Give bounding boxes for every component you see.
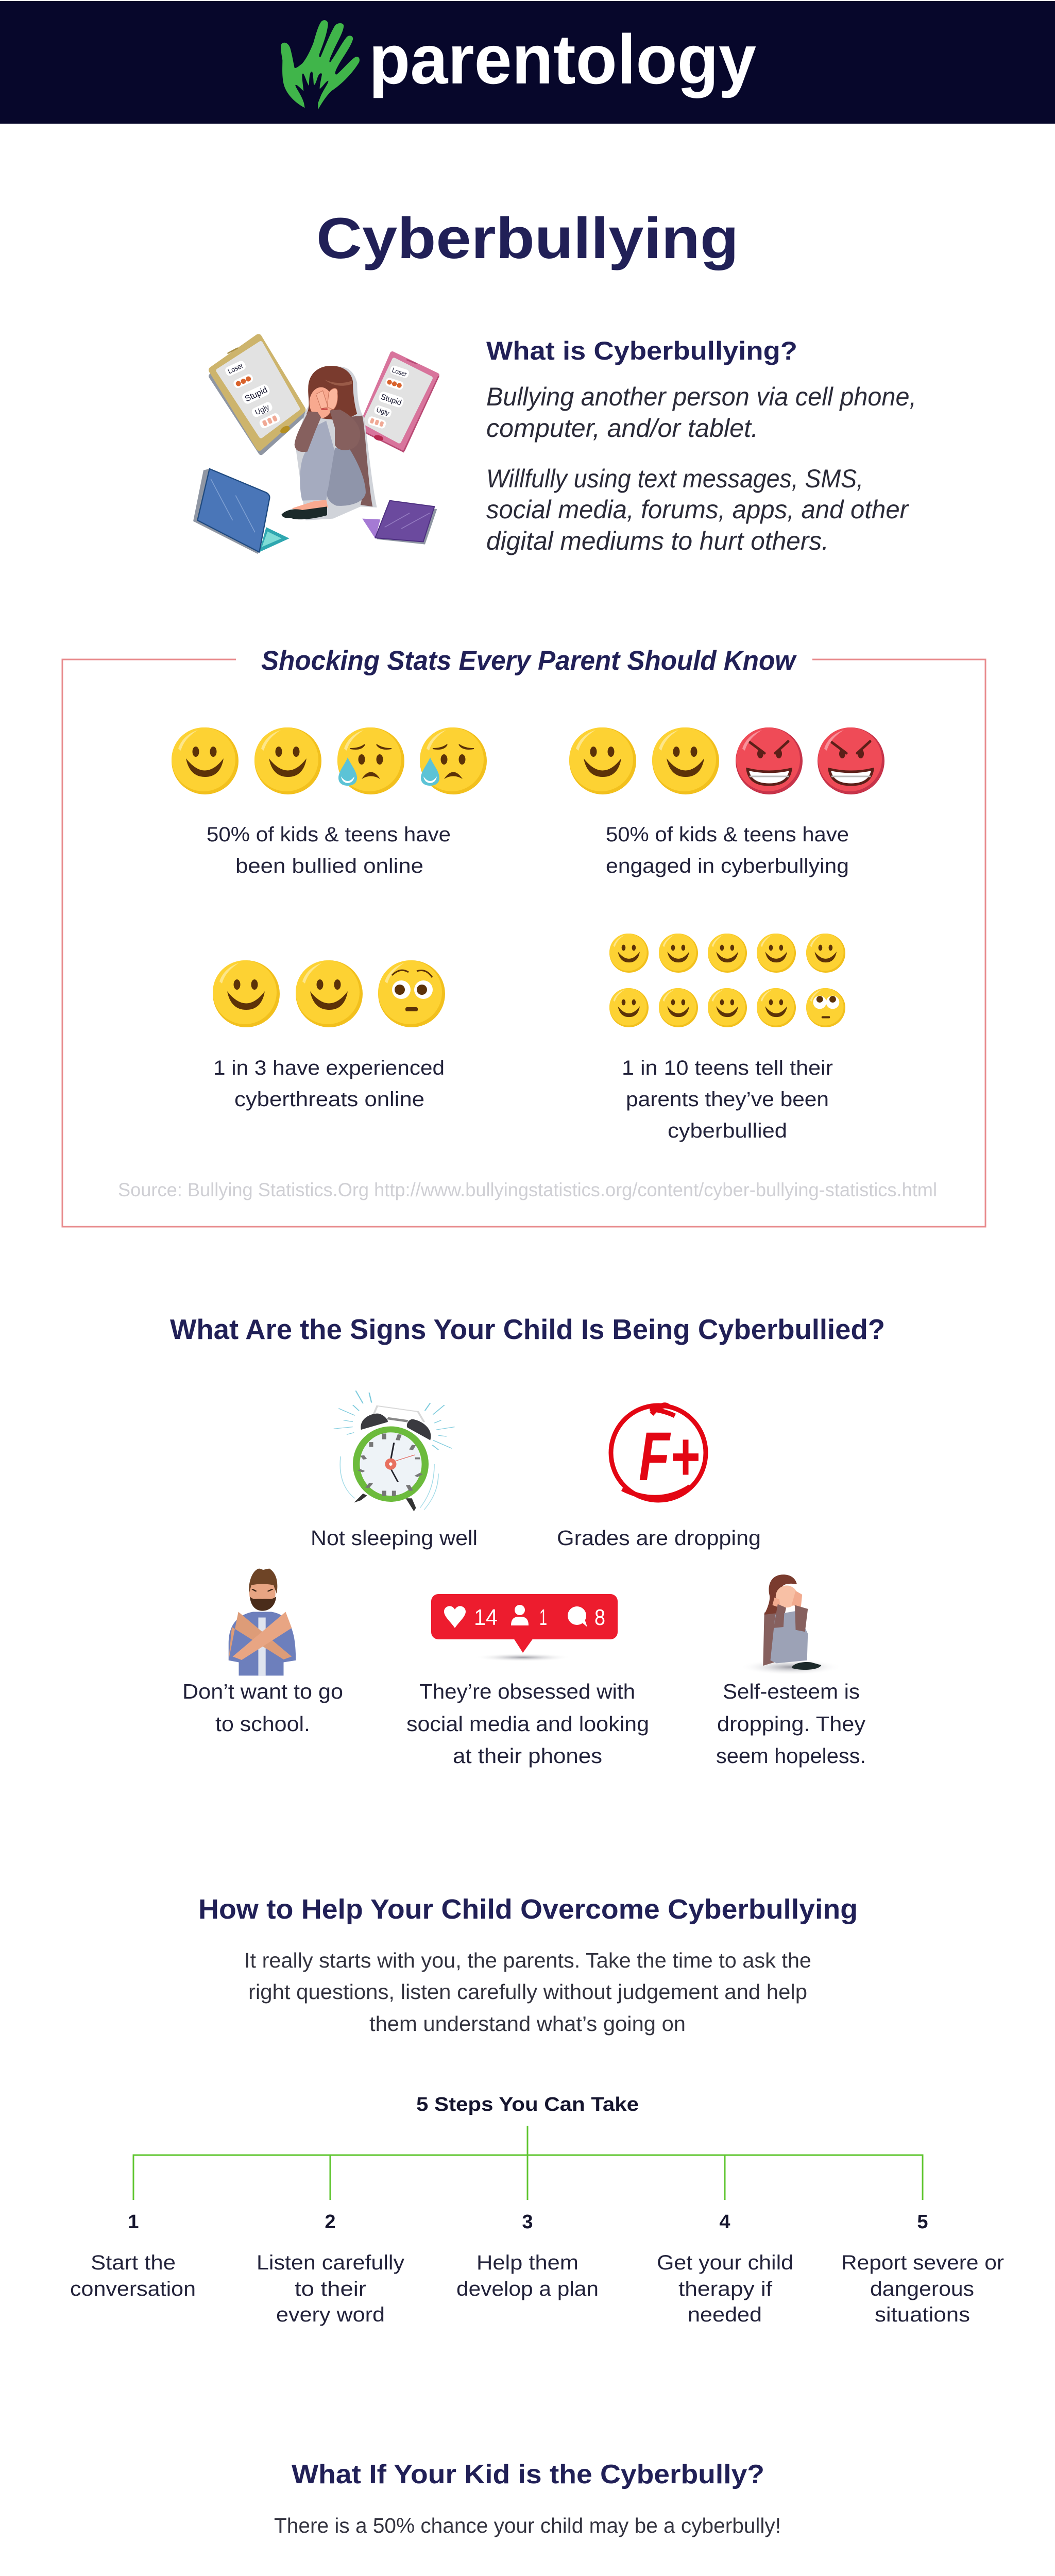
subheading: What is Cyberbullying? xyxy=(486,336,797,365)
comment count xyxy=(568,1605,605,1630)
follower count xyxy=(511,1605,547,1630)
stat: tell parents: cyberbullied xyxy=(668,1120,787,1142)
step 4: therapy if xyxy=(678,2278,773,2300)
step 5: dangerous xyxy=(870,2278,974,2300)
connector tree xyxy=(133,2126,923,2200)
stat: been bullied: 50% of kids & teens have xyxy=(207,823,451,846)
heart count: 14 xyxy=(474,1605,498,1630)
definition two: social media, forums, apps, and other xyxy=(486,495,909,524)
heading: how to help: How to Help Your Child Overcome Cyberbullying xyxy=(198,1894,858,1925)
label: obsessed: at their phones xyxy=(453,1744,602,1768)
heart count xyxy=(444,1605,498,1630)
label: school: to school. xyxy=(215,1712,310,1736)
heading: signs: What Are the Signs Your Child Is Being Cyberbullied? xyxy=(170,1313,885,1345)
icon: pink phone xyxy=(359,354,439,452)
step 1: 1 xyxy=(128,2211,139,2233)
label: not sleeping: Not sleeping well xyxy=(311,1526,478,1550)
icon: gold phone: Ugly xyxy=(254,403,271,417)
definition two xyxy=(486,464,909,555)
follower count: 1 xyxy=(539,1605,547,1630)
definition one: computer, and/or tablet. xyxy=(486,414,758,443)
label: self-esteem: seem hopeless. xyxy=(716,1744,866,1768)
step 1: Start the xyxy=(91,2251,176,2274)
step 3 xyxy=(456,2211,599,2300)
icon: gold phone xyxy=(211,337,304,452)
label: obsessed: social media and looking xyxy=(406,1712,649,1736)
label: obsessed: They’re obsessed with xyxy=(419,1680,635,1703)
label: self-esteem xyxy=(716,1680,866,1768)
stat: cyberthreats: cyberthreats online xyxy=(234,1088,424,1111)
header banner xyxy=(0,1,1055,124)
definition one: Bullying another person via cell phone, xyxy=(486,382,916,411)
step 2: 2 xyxy=(325,2211,336,2233)
intro paragraph: them understand what’s going on xyxy=(369,2012,686,2036)
label: obsessed xyxy=(406,1680,649,1768)
stat: engaged in cyberbullying: 50% of kids & teens have xyxy=(606,823,849,846)
icon: purple laptop xyxy=(362,501,437,545)
icon: pink phone: Ugly xyxy=(376,405,390,417)
stat: engaged in cyberbullying xyxy=(569,727,884,877)
step 4 xyxy=(657,2211,793,2326)
icon: gold phone: Loser xyxy=(227,361,245,376)
source note: Source: Bullying Statistics.Org http://www.bullyingstatistics.org/content/cyber-bullying-statistics.html xyxy=(118,1179,937,1200)
icon: man crossing arms xyxy=(229,1568,296,1675)
definition two: digital mediums to hurt others. xyxy=(486,527,829,555)
logo wordmark: parentology xyxy=(369,20,756,98)
step 3: Help them xyxy=(477,2251,578,2274)
step 2: every word xyxy=(276,2303,385,2326)
stat: tell parents: parents they’ve been xyxy=(626,1088,829,1111)
stat: cyberthreats xyxy=(213,960,445,1111)
step 5: 5 xyxy=(917,2211,928,2233)
step 3: develop a plan xyxy=(456,2278,599,2300)
label: grades dropping: Grades are dropping xyxy=(557,1526,761,1550)
label: school: Don’t want to go xyxy=(182,1680,343,1703)
step 4: needed xyxy=(688,2303,762,2326)
step 4: Get your child xyxy=(657,2251,793,2274)
stat: been bullied xyxy=(172,727,487,877)
intro paragraph: It really starts with you, the parents. Take the time to ask the xyxy=(244,1948,811,1972)
comment count: 8 xyxy=(594,1605,605,1630)
icon: crying girl xyxy=(282,366,377,520)
logo hand icon xyxy=(281,20,360,110)
steps heading: 5 Steps You Can Take xyxy=(416,2094,639,2115)
step 1 xyxy=(70,2211,196,2300)
icon: gold phone: Stupid xyxy=(243,385,269,404)
step 4: 4 xyxy=(719,2211,730,2233)
step 2: to their xyxy=(295,2278,366,2300)
step 2: Listen carefully xyxy=(257,2251,404,2274)
text block: what is cyberbullying xyxy=(486,336,916,555)
panel heading: Shocking Stats Every Parent Should Know xyxy=(261,646,797,676)
icon: sad seated girl xyxy=(740,1574,842,1675)
icon: F plus grade xyxy=(611,1405,706,1500)
step 3: 3 xyxy=(522,2211,533,2233)
step 2 xyxy=(257,2211,404,2326)
panel: shocking stats xyxy=(62,646,985,1227)
icon: blue laptop xyxy=(193,469,290,554)
stat: tell parents xyxy=(609,934,845,1142)
title: Cyberbullying xyxy=(316,206,739,270)
step 5: Report severe or xyxy=(841,2251,1004,2274)
stat: engaged in cyberbullying: engaged in cyberbullying xyxy=(606,855,849,877)
stat: been bullied: been bullied online xyxy=(235,855,423,877)
illustration: girl surrounded by devices xyxy=(193,337,439,554)
step 5: situations xyxy=(875,2303,970,2326)
stat: cyberthreats: 1 in 3 have experienced xyxy=(213,1057,445,1079)
intro paragraph: right questions, listen carefully without judgement and help xyxy=(248,1980,807,2004)
icon: alarm clock xyxy=(334,1391,455,1511)
F plus mark: F+ xyxy=(639,1418,700,1495)
heading: what if: What If Your Kid is the Cyberbully? xyxy=(292,2460,764,2489)
definition one xyxy=(486,382,916,443)
label: self-esteem: Self-esteem is xyxy=(723,1680,860,1703)
icon: social media notification bubble xyxy=(431,1594,618,1662)
label: school xyxy=(182,1680,343,1736)
icon: pink phone: Loser xyxy=(391,366,408,378)
definition two: Willfully using text messages, SMS, xyxy=(486,464,863,493)
label: self-esteem: dropping. They xyxy=(717,1712,866,1736)
stat: tell parents: 1 in 10 teens tell their xyxy=(622,1057,833,1079)
intro paragraph xyxy=(244,1948,811,2036)
subheading: fifty percent: There is a 50% chance your child may be a cyberbully! xyxy=(274,2514,781,2537)
step 5 xyxy=(841,2211,1004,2326)
icon: pink phone: Stupid xyxy=(380,393,403,408)
step 1: conversation xyxy=(70,2278,196,2300)
